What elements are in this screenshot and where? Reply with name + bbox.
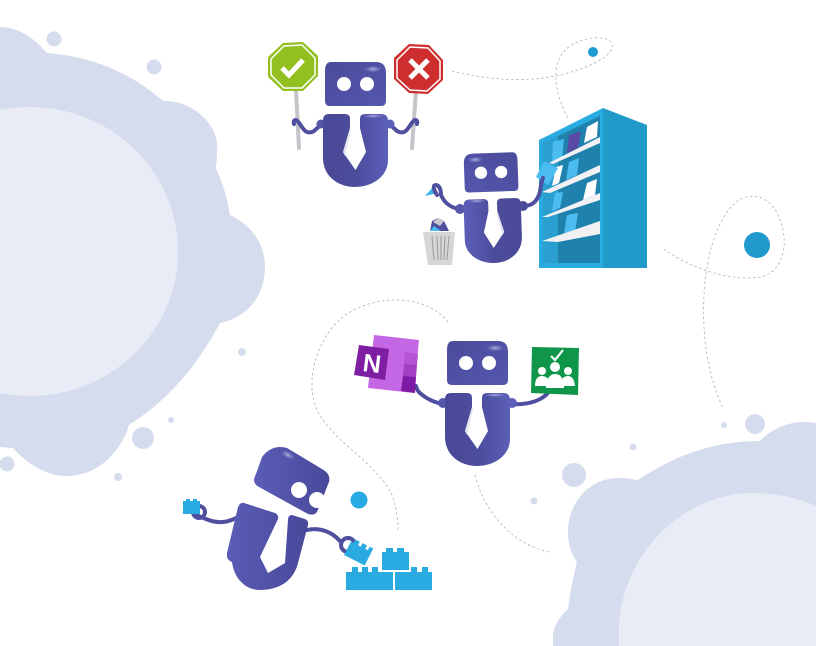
held paper left (425, 187, 438, 196)
robot body and head (323, 62, 388, 187)
robot body and head (445, 341, 510, 466)
robot 3: holding app icons (354, 335, 579, 466)
bookshelf (539, 108, 647, 268)
shelves (542, 137, 600, 242)
stacked block bottom right (395, 567, 432, 590)
sign poles (296, 90, 416, 148)
stacked block top (382, 548, 409, 570)
robot body and head (462, 152, 523, 264)
robot body (227, 503, 308, 590)
background cloud: left (0, 27, 265, 476)
background cloud: bottom right (553, 422, 816, 646)
robot 1: holding yes and no signs (268, 42, 443, 187)
accent dot: right (744, 232, 770, 258)
icon: trash can (423, 218, 455, 265)
held paper right (536, 161, 558, 185)
robot 4: building blocks (183, 447, 432, 590)
accent dot: lower (350, 492, 368, 508)
arms (416, 386, 551, 404)
dashed connector paths (312, 38, 784, 552)
accent dot: top (588, 47, 598, 57)
shelf papers (552, 121, 598, 233)
icon: OneNote: N (361, 349, 383, 379)
icon: OneNote (354, 335, 419, 393)
robot 2: sorting papers (423, 152, 558, 265)
decorative bubbles (0, 32, 765, 504)
icon: green check sign (268, 42, 318, 91)
icon: Teams classroom (531, 347, 579, 395)
arms (193, 506, 355, 552)
robot head (254, 447, 329, 515)
block held right (344, 538, 373, 565)
icon: red cross sign (394, 44, 443, 94)
stacked block bottom left (346, 567, 393, 590)
arms (434, 178, 543, 209)
block held left (183, 499, 200, 514)
blue blocks (183, 499, 432, 590)
arms (294, 120, 417, 132)
